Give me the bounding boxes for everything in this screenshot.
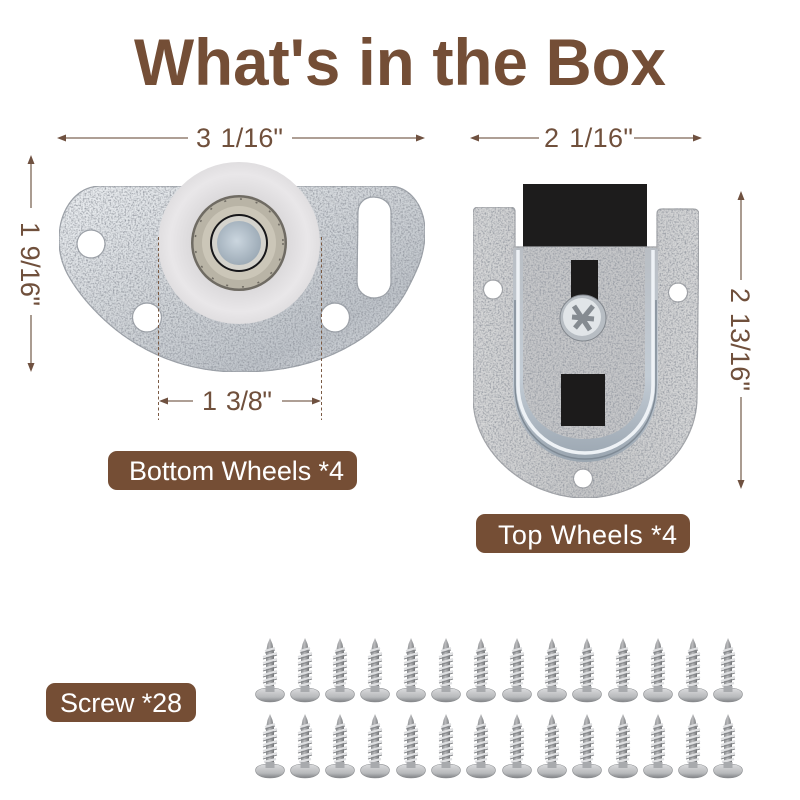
dimension: 2 1/16 inches: 2 1/16" xyxy=(544,123,633,153)
dimension: 1 9/16 inches xyxy=(15,155,45,372)
dimension: 1 3/8 inches: 1 3/8" xyxy=(202,386,272,416)
badge: top wheels xyxy=(476,514,690,553)
lower black slot xyxy=(561,374,605,426)
bearing xyxy=(191,195,287,291)
screws: 28 pieces in two rows xyxy=(256,638,742,778)
dimension: 3 1/16 inches xyxy=(57,123,425,153)
dimension: 2 1/16 inches xyxy=(470,123,702,153)
top wheel plate xyxy=(473,207,699,498)
dimension: 1 9/16 inches: 1 9/16" xyxy=(15,222,45,306)
black slider top xyxy=(523,184,647,250)
dimension: 2 13/16 inches: 2 13/16" xyxy=(725,288,755,391)
nylon wheel xyxy=(158,162,320,324)
badge: top wheels: Top Wheels *4 xyxy=(498,520,677,550)
dimension: 1 3/8 inches xyxy=(158,237,322,420)
badge: screws: Screw *28 xyxy=(60,688,182,718)
phillips screw xyxy=(560,295,606,341)
inner slide panel xyxy=(523,247,645,439)
badge: bottom wheels: Bottom Wheels *4 xyxy=(129,456,344,486)
title: What's in the Box xyxy=(134,25,666,99)
panel: bottom wheel xyxy=(59,162,425,372)
badge: bottom wheels xyxy=(108,451,357,490)
dimension: 3 1/16 inches: 3 1/16" xyxy=(196,123,283,153)
dimension: 2 13/16 inches xyxy=(725,191,755,489)
screw row 1 xyxy=(256,638,742,702)
bottom wheel plate xyxy=(59,186,425,372)
screw row 2 xyxy=(256,714,742,778)
panel: top wheel xyxy=(473,184,699,498)
upper black slot xyxy=(571,260,598,300)
U channel xyxy=(513,248,658,462)
badge: screws xyxy=(46,683,196,722)
